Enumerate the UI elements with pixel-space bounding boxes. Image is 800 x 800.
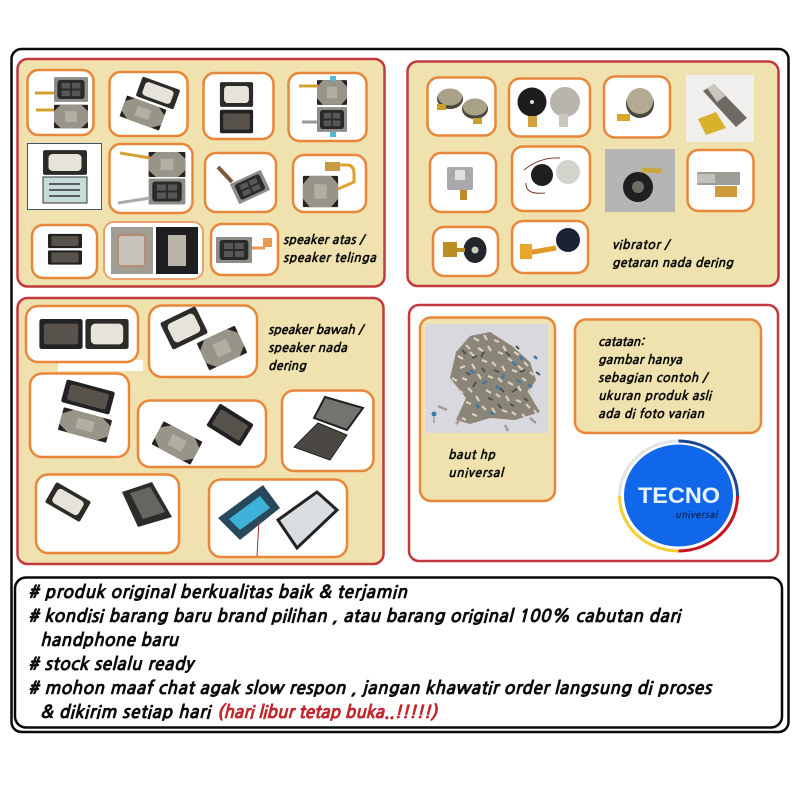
tile: speaker atas 7 [205, 153, 276, 212]
photo: baut [426, 324, 548, 433]
label: speaker bawah: speaker nada [268, 341, 348, 354]
tile: speaker bawah 1 [26, 306, 143, 371]
label: speaker atas: speaker telinga [283, 251, 377, 264]
text: keterangan: # kondisi barang baru brand pilihan , atau barang original 100% cabutan dari [28, 607, 683, 625]
text: keterangan [28, 583, 713, 721]
callout: catatan: ada di foto varian [598, 407, 704, 420]
panel: keterangan [15, 578, 782, 728]
tile: speaker bawah 5 [282, 390, 374, 471]
tile: speaker atas 10 [104, 222, 203, 279]
tile: speaker bawah 4 [138, 400, 266, 467]
label: speaker bawah [268, 323, 366, 372]
tile: speaker atas 6 [110, 144, 192, 213]
tile: vibrator 2 [509, 78, 590, 136]
tile: speaker atas 4 [288, 73, 366, 141]
label: vibrator [612, 238, 734, 269]
callout: catatan [575, 320, 761, 433]
tile: speaker bawah 3 [30, 374, 129, 457]
callout: catatan: ukuran produk asli [598, 389, 713, 402]
logo: TECNO universal: universal [675, 510, 719, 520]
label: baut hp: universal [448, 466, 505, 479]
tile: speaker bawah 7 [209, 480, 347, 557]
text: keterangan: handphone baru [40, 631, 179, 649]
label: speaker atas [283, 233, 377, 264]
logo: TECNO universal [620, 441, 738, 551]
logo: TECNO universal: TECNO [638, 483, 720, 508]
tile: speaker atas 5 [28, 144, 102, 210]
label: vibrator: getaran nada dering [612, 256, 734, 269]
tile: vibrator 5 [430, 153, 496, 212]
text: keterangan: # mohon maaf chat agak slow respon , jangan khawatir order langsung di proses [28, 679, 713, 697]
panel: speaker bawah [18, 298, 384, 564]
label: baut hp: baut hp [448, 448, 495, 461]
text: keterangan: # produk original berkualitas baik & terjamin [28, 583, 408, 601]
label: speaker atas: speaker atas / [283, 233, 367, 246]
tile: vibrator 1 [428, 78, 496, 136]
tile: speaker atas 11 [211, 224, 278, 275]
text: keterangan: & dikirim setiap hari [40, 703, 213, 721]
tile: speaker bawah 6 [36, 474, 179, 553]
tile: speaker bawah 2 [149, 306, 257, 377]
tile: speaker atas 2 [110, 72, 188, 136]
tile: baut hp [420, 318, 555, 501]
tile: speaker atas 8 [293, 155, 366, 212]
tile: vibrator 3 [604, 76, 670, 138]
tile: speaker atas 1 [28, 70, 94, 135]
label: baut hp [448, 448, 505, 479]
tile: vibrator 6 [512, 146, 590, 211]
panel: speaker atas [18, 59, 384, 286]
tile: speaker atas 3 [204, 73, 274, 139]
panel: vibrator [408, 62, 778, 286]
tile: vibrator 10 [512, 221, 588, 273]
text: keterangan: # stock selalu ready [28, 655, 196, 673]
label: speaker bawah: dering [268, 359, 307, 372]
panel: baut hp dan catatan [409, 305, 778, 561]
text: keterangan: (hari libur tetap buka..!!!!!) [217, 703, 439, 721]
tile: vibrator 9 [433, 227, 498, 276]
label: speaker bawah: speaker bawah / [268, 323, 366, 336]
tile: vibrator 8 [688, 150, 754, 211]
photo: vibrator gray [605, 149, 675, 212]
tile: speaker atas 9 [32, 225, 97, 278]
callout: catatan: gambar hanya [598, 353, 683, 366]
photo: vibrator motor [686, 75, 754, 142]
callout: catatan: sebagian contoh / [598, 371, 710, 384]
callout: catatan: catatan: [598, 335, 645, 348]
label: vibrator: vibrator / [612, 238, 672, 251]
